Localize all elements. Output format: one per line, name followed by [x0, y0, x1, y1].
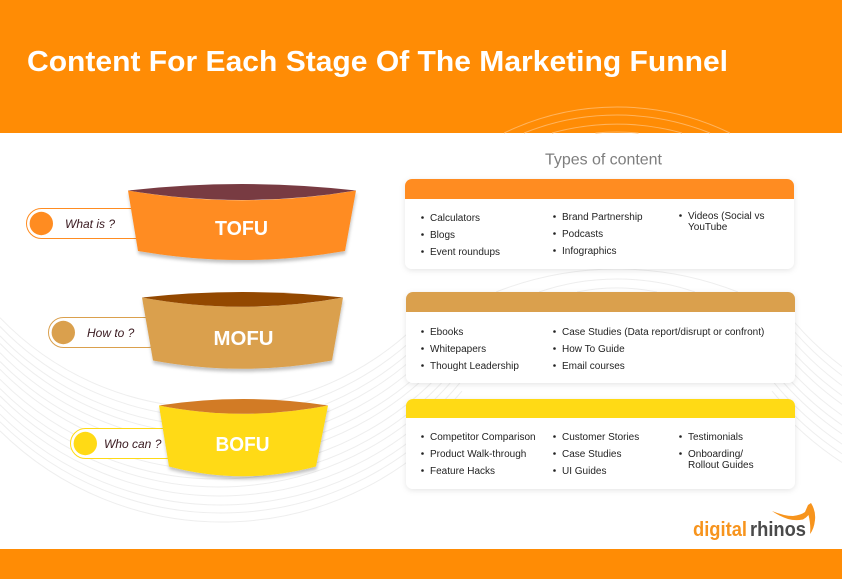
- funnel: MOFU: [142, 292, 343, 369]
- pill: how to: [48, 318, 164, 348]
- list: BOFU content types: Product Walk-through: [430, 449, 526, 460]
- list: BOFU content types: Case Studies: [562, 449, 621, 460]
- panel: TOFU content: [405, 179, 794, 269]
- funnel: BOFU: BOFU: [216, 433, 270, 456]
- list: BOFU content types: Testimonials: [688, 432, 743, 443]
- panel header: BOFU: [406, 399, 795, 418]
- pill: what is: [26, 208, 156, 238]
- heading: types of content: Types of content: [545, 152, 663, 168]
- list: BOFU content types: Feature Hacks: [430, 466, 495, 477]
- list: MOFU content types: How To Guide: [562, 344, 625, 355]
- list: MOFU content types: Ebooks: [430, 327, 463, 338]
- list: TOFU content types: Blogs: [430, 230, 455, 241]
- list: BOFU content types: Customer Stories: [562, 432, 639, 443]
- logo: digital rhinos: [693, 503, 815, 541]
- panel header: TOFU: [405, 179, 794, 199]
- header band: [0, 0, 842, 133]
- panel header: MOFU: [406, 292, 795, 312]
- icon: rhino horn swoosh: [772, 503, 815, 534]
- list: TOFU content types: [421, 211, 765, 258]
- list: TOFU content types: Podcasts: [562, 229, 603, 240]
- logo: digital rhinos: rhinos: [750, 519, 806, 541]
- list: MOFU content types: Email courses: [562, 361, 625, 372]
- list: TOFU content types: Videos (Social vs: [688, 211, 765, 222]
- pill: who can: Who can ?: [104, 437, 162, 451]
- list: BOFU content types: [421, 432, 754, 477]
- panel: BOFU content: [406, 399, 795, 489]
- list: MOFU content types: Whitepapers: [430, 344, 486, 355]
- list: BOFU content types: Competitor Comparison: [430, 432, 536, 443]
- list: BOFU content types: Rollout Guides: [688, 460, 754, 471]
- list: TOFU content types: Brand Partnership: [562, 212, 643, 223]
- funnel: MOFU: MOFU: [214, 327, 274, 350]
- list: TOFU content types: Event roundups: [430, 247, 500, 258]
- panel: MOFU content: [406, 292, 795, 383]
- logo: digital rhinos: digital: [693, 519, 747, 541]
- funnel: BOFU: [159, 399, 328, 476]
- list: TOFU content types: YouTube: [688, 222, 728, 233]
- list: MOFU content types: Case Studies (Data report/disrupt or confront): [562, 327, 764, 338]
- list: MOFU content types: Thought Leadership: [430, 361, 519, 372]
- list: TOFU content types: Infographics: [562, 246, 616, 257]
- pill: what is: What is ?: [65, 217, 115, 231]
- list: MOFU content types: [421, 327, 764, 372]
- footer band: [0, 549, 842, 579]
- list: BOFU content types: UI Guides: [562, 466, 606, 477]
- pill: who can: [70, 428, 180, 458]
- funnel: TOFU: [128, 184, 356, 260]
- pill: how to: How to ?: [87, 326, 135, 340]
- title: Content For Each Stage Of The Marketing Funnel: [27, 46, 728, 78]
- list: BOFU content types: Onboarding/: [688, 449, 743, 460]
- funnel: TOFU: TOFU: [215, 217, 268, 240]
- list: TOFU content types: Calculators: [430, 213, 480, 224]
